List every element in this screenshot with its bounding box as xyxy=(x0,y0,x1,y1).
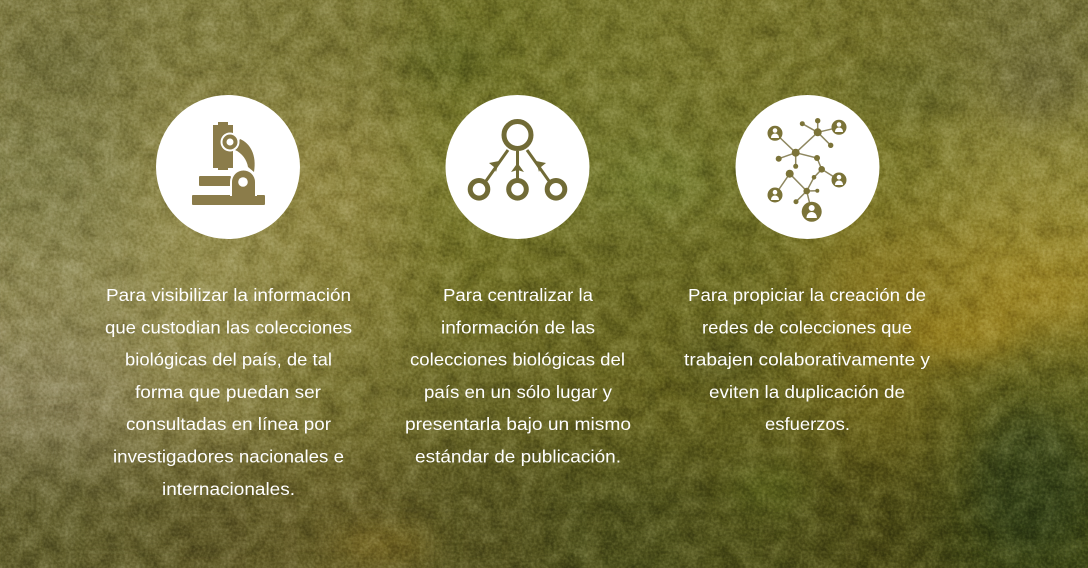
text block: redes: esfuerzos. xyxy=(765,414,850,434)
panel: collaboration network icon xyxy=(736,95,880,239)
text block: centralizar: Para centralizar la xyxy=(443,285,593,305)
text block: redes: redes de colecciones que xyxy=(702,318,912,338)
text block: centralizar: colecciones biológicas del xyxy=(410,350,625,370)
text block: redes: eviten la duplicación de xyxy=(709,382,905,402)
text block: centralizar: país en un sólo lugar y xyxy=(424,382,612,402)
text block: redes: Para propiciar la creación de xyxy=(688,285,926,305)
text block: centralizar: presentarla bajo un mismo xyxy=(405,414,631,434)
text block: visibilizar: forma que puedan ser xyxy=(135,382,321,402)
text block: centralizar: información de las xyxy=(441,318,595,338)
text block: redes xyxy=(684,285,930,434)
text block: centralizar: estándar de publicación. xyxy=(415,446,621,466)
panel: central node icon xyxy=(446,95,590,239)
text block: visibilizar: que custodian las colecciones xyxy=(105,318,352,338)
text block: redes: trabajen colaborativamente y xyxy=(684,350,930,370)
text block: visibilizar: Para visibilizar la información xyxy=(106,285,351,305)
panel: microscope icon xyxy=(156,95,300,239)
text block: visibilizar: biológicas del país, de tal xyxy=(125,350,332,370)
text block: visibilizar xyxy=(105,285,352,499)
text block: visibilizar: investigadores nacionales e xyxy=(113,446,344,466)
text block: centralizar xyxy=(405,285,631,466)
text block: visibilizar: internacionales. xyxy=(162,479,295,499)
text block: visibilizar: consultadas en línea por xyxy=(126,414,331,434)
